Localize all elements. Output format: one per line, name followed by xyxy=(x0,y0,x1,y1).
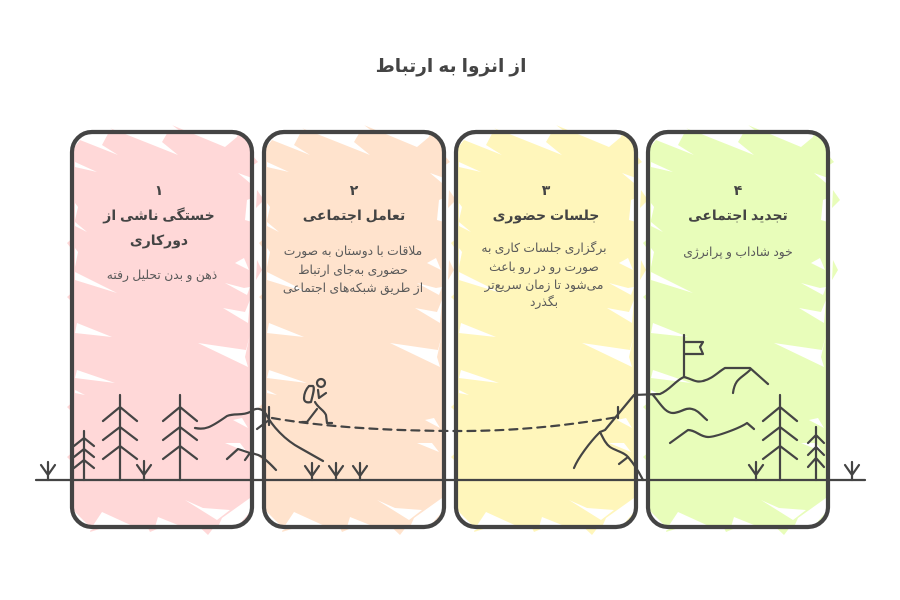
panel: card 3 border xyxy=(456,132,636,527)
left mountains xyxy=(195,407,323,470)
text: card 3: ۳ xyxy=(542,182,551,198)
title: از انزوا به ارتباط xyxy=(376,55,526,77)
panel: card 1 border xyxy=(72,132,252,527)
text: card 2: ۲ xyxy=(350,182,359,198)
panel: card 2 border xyxy=(264,132,444,527)
icon: tree 2 xyxy=(103,395,137,480)
text: card 4: تجدید اجتماعی xyxy=(688,207,788,223)
icon: tree 4 xyxy=(763,395,797,480)
icons: grass tufts xyxy=(41,461,859,480)
icon: tree 1 small xyxy=(74,431,94,480)
icon: tree 3 xyxy=(163,395,197,480)
text: card 3: صورت رو در رو باعث xyxy=(489,260,599,275)
text: card 4: خود شاداب و پرانرژی xyxy=(683,245,793,260)
text: card 1: ذهن و بدن تحلیل رفته xyxy=(107,268,217,283)
text: card 2: از طریق شبکه‌های اجتماعی xyxy=(283,281,423,296)
text: card 3: جلسات حضوری xyxy=(493,207,599,224)
icon: hiker xyxy=(302,379,332,423)
icon: tree 5 small xyxy=(808,427,824,480)
text: card 4: ۴ xyxy=(734,182,743,198)
text: card 1 xyxy=(102,182,217,283)
right mountains with flag xyxy=(574,335,768,480)
panel: card 4 fill xyxy=(643,125,840,535)
text: card 4 xyxy=(683,182,793,260)
text: card 1: خستگی ناشی از xyxy=(102,207,215,223)
ground line xyxy=(36,479,865,481)
text: card 2: تعامل اجتماعی xyxy=(303,207,405,223)
panel: card 1 fill xyxy=(67,125,264,535)
text: card 2 xyxy=(283,182,423,296)
text: card 3: می‌شود تا زمان سریع‌تر xyxy=(484,278,603,293)
text: card 2: حضوری به‌جای ارتباط xyxy=(298,263,408,278)
text: card 1: ۱ xyxy=(155,182,163,198)
text: card 2: ملاقات با دوستان به صورت xyxy=(284,244,422,259)
panel: card 4 border xyxy=(648,132,828,527)
panel: card 2 fill xyxy=(259,125,456,535)
text: card 3 xyxy=(481,182,607,310)
dashed path xyxy=(272,417,618,431)
text: card 3: بگذرد xyxy=(530,294,558,310)
text: card 1: دورکاری xyxy=(130,232,188,249)
text: card 3: برگزاری جلسات کاری به xyxy=(481,240,607,256)
panel: card 3 fill xyxy=(451,125,648,535)
